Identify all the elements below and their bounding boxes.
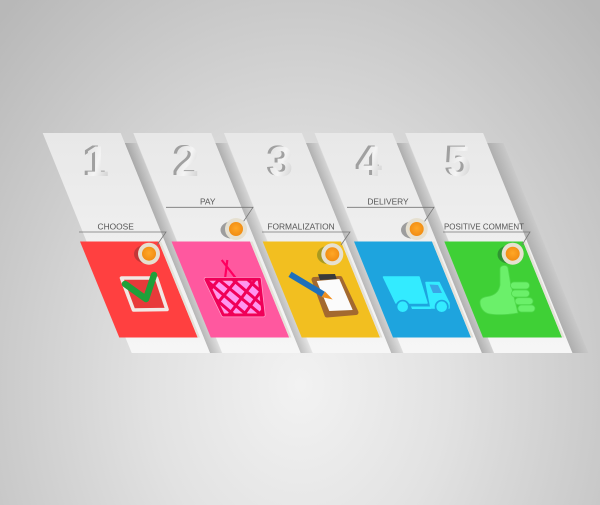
icon: clipboard and pencil (290, 274, 356, 315)
number 3: 3 (266, 137, 290, 185)
panel 1 sheet (43, 133, 210, 353)
number 5: 5 (444, 137, 468, 185)
panel 4 sheet (314, 133, 482, 353)
colour block blue (354, 242, 471, 338)
panel 4: delivery (314, 133, 494, 353)
marker (317, 243, 343, 265)
number 2: 2 (172, 137, 196, 185)
number 1: 1 (85, 138, 109, 186)
label pay: PAY (200, 196, 216, 206)
number 1: 1 (82, 137, 106, 185)
panel 3 sheet (224, 133, 391, 353)
leader line (443, 232, 530, 245)
number 3: 3 (269, 138, 293, 186)
panel 1: choose (43, 133, 222, 353)
fold strip (523, 242, 564, 338)
panel 2 sheet (133, 133, 301, 353)
label formalization: FORMALIZATION (267, 222, 335, 232)
colour block pink (172, 242, 289, 338)
leader line (262, 232, 350, 245)
fold strip (158, 242, 200, 338)
panel 5 shadow (487, 143, 588, 353)
panel 3 shadow (306, 143, 403, 353)
colour block red (80, 242, 198, 338)
number 4: 4 (355, 137, 379, 185)
colour block yellow (263, 242, 380, 338)
panel 2: pay (133, 133, 313, 353)
leader line (347, 207, 434, 222)
panel 1 shadow (125, 143, 222, 353)
label positive comment: POSITIVE COMMENT (444, 222, 524, 232)
panel 3: formalization (224, 133, 403, 353)
icon: basket (204, 260, 266, 318)
icon: checkbox with tick (122, 275, 167, 310)
icon: thumbs up (480, 265, 535, 315)
number 4: 4 (358, 138, 382, 186)
panel 4 shadow (396, 143, 494, 353)
marker (134, 243, 160, 265)
marker (498, 243, 524, 265)
label choose: CHOOSE (98, 222, 134, 232)
panel 5 sheet (405, 133, 572, 353)
number 5: 5 (447, 138, 471, 186)
icon: truck (384, 277, 449, 314)
marker (401, 218, 428, 240)
fold strip (250, 242, 292, 338)
number 2: 2 (175, 138, 199, 186)
panel 5: positive comment (405, 133, 588, 353)
leader line (79, 232, 166, 245)
leader line (166, 207, 253, 222)
colour block green (444, 242, 562, 338)
marker (220, 218, 247, 240)
panel 2 shadow (215, 143, 313, 353)
label delivery: DELIVERY (367, 196, 409, 206)
fold strip (432, 242, 474, 338)
fold strip (341, 242, 382, 338)
